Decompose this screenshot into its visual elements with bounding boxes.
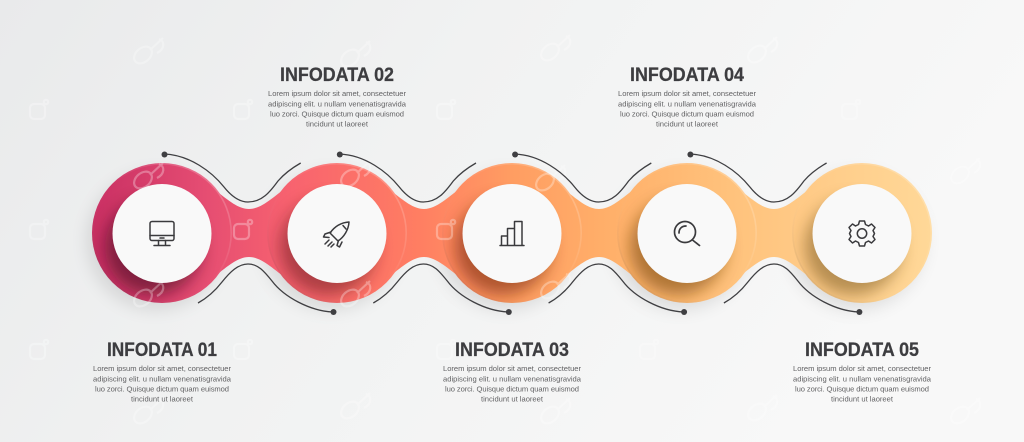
bottom line 2 bbox=[373, 264, 512, 315]
text block: Infodata 04: adipiscing elit. u nullam venenatisgravida bbox=[618, 100, 757, 108]
text block: Infodata 04: tincidunt ut laoreet bbox=[656, 120, 719, 128]
text block: Infodata 04: INFODATA 04 bbox=[630, 65, 744, 86]
top line 2 bbox=[337, 152, 476, 202]
text block: Infodata 05: adipiscing elit. u nullam venenatisgravida bbox=[793, 374, 932, 384]
text block: Infodata 05: luo zorci. Quisque dictum quam euismod bbox=[795, 384, 929, 394]
bottom line 4 bbox=[724, 264, 862, 315]
text block: Infodata 03: tincidunt ut laoreet bbox=[481, 394, 544, 404]
bottom line 3 bbox=[549, 264, 687, 315]
icon: monitor bbox=[150, 222, 174, 246]
text block: Infodata 05 bbox=[793, 340, 932, 404]
text block: Infodata 04 bbox=[618, 65, 757, 128]
text block: Infodata 04: Lorem ipsum dolor sit amet, consectetuer bbox=[618, 89, 756, 98]
text block: Infodata 05: Lorem ipsum dolor sit amet, consectetuer bbox=[793, 364, 931, 373]
top line 3 bbox=[512, 152, 651, 202]
band watermarks bbox=[131, 161, 570, 310]
text block: Infodata 05: INFODATA 05 bbox=[805, 340, 919, 361]
text block: Infodata 01: tincidunt ut laoreet bbox=[131, 394, 194, 404]
icon: bar chart bbox=[500, 222, 524, 246]
text block: Infodata 02: Lorem ipsum dolor sit amet, consectetuer bbox=[268, 89, 406, 98]
text block: Infodata 02: INFODATA 02 bbox=[280, 65, 394, 86]
connector lines bbox=[162, 152, 862, 315]
text block: Infodata 03: Lorem ipsum dolor sit amet, consectetuer bbox=[443, 364, 581, 373]
text block: Infodata 04: luo zorci. Quisque dictum quam euismod bbox=[620, 110, 754, 118]
connectors bbox=[215, 190, 808, 276]
icon: gear bbox=[849, 221, 875, 246]
text block: Infodata 03: adipiscing elit. u nullam venenatisgravida bbox=[443, 374, 582, 384]
text block: Infodata 02: tincidunt ut laoreet bbox=[306, 120, 369, 128]
text block: Infodata 02: luo zorci. Quisque dictum quam euismod bbox=[270, 110, 404, 118]
top line 1 bbox=[162, 152, 301, 202]
text block: Infodata 01: luo zorci. Quisque dictum quam euismod bbox=[95, 384, 229, 394]
icon: rocket bbox=[324, 222, 349, 247]
text block: Infodata 05: tincidunt ut laoreet bbox=[831, 394, 894, 404]
text block: Infodata 03: luo zorci. Quisque dictum quam euismod bbox=[445, 384, 579, 394]
text block: Infodata 01: adipiscing elit. u nullam venenatisgravida bbox=[93, 374, 232, 384]
text block: Infodata 01: INFODATA 01 bbox=[107, 340, 217, 361]
text block: Infodata 02: adipiscing elit. u nullam venenatisgravida bbox=[268, 100, 407, 108]
band drop shadow bbox=[88, 173, 924, 309]
text block: Infodata 01: Lorem ipsum dolor sit amet, consectetuer bbox=[93, 364, 231, 373]
step 1 ring bbox=[92, 163, 232, 303]
bottom line 1 bbox=[198, 264, 336, 315]
icon: magnifier bbox=[674, 222, 700, 246]
text block: Infodata 03: INFODATA 03 bbox=[455, 340, 569, 361]
step 3 ring bbox=[442, 163, 582, 303]
text block: Infodata 03 bbox=[443, 340, 582, 404]
step 5 ring bbox=[792, 163, 932, 303]
connected band bbox=[92, 163, 932, 303]
step 4 ring bbox=[617, 163, 757, 303]
white discs bbox=[112, 184, 912, 283]
step 2 ring bbox=[267, 163, 407, 303]
text block: Infodata 02 bbox=[268, 65, 407, 128]
text block: Infodata 01 bbox=[93, 340, 232, 404]
top line 4 bbox=[687, 152, 827, 202]
